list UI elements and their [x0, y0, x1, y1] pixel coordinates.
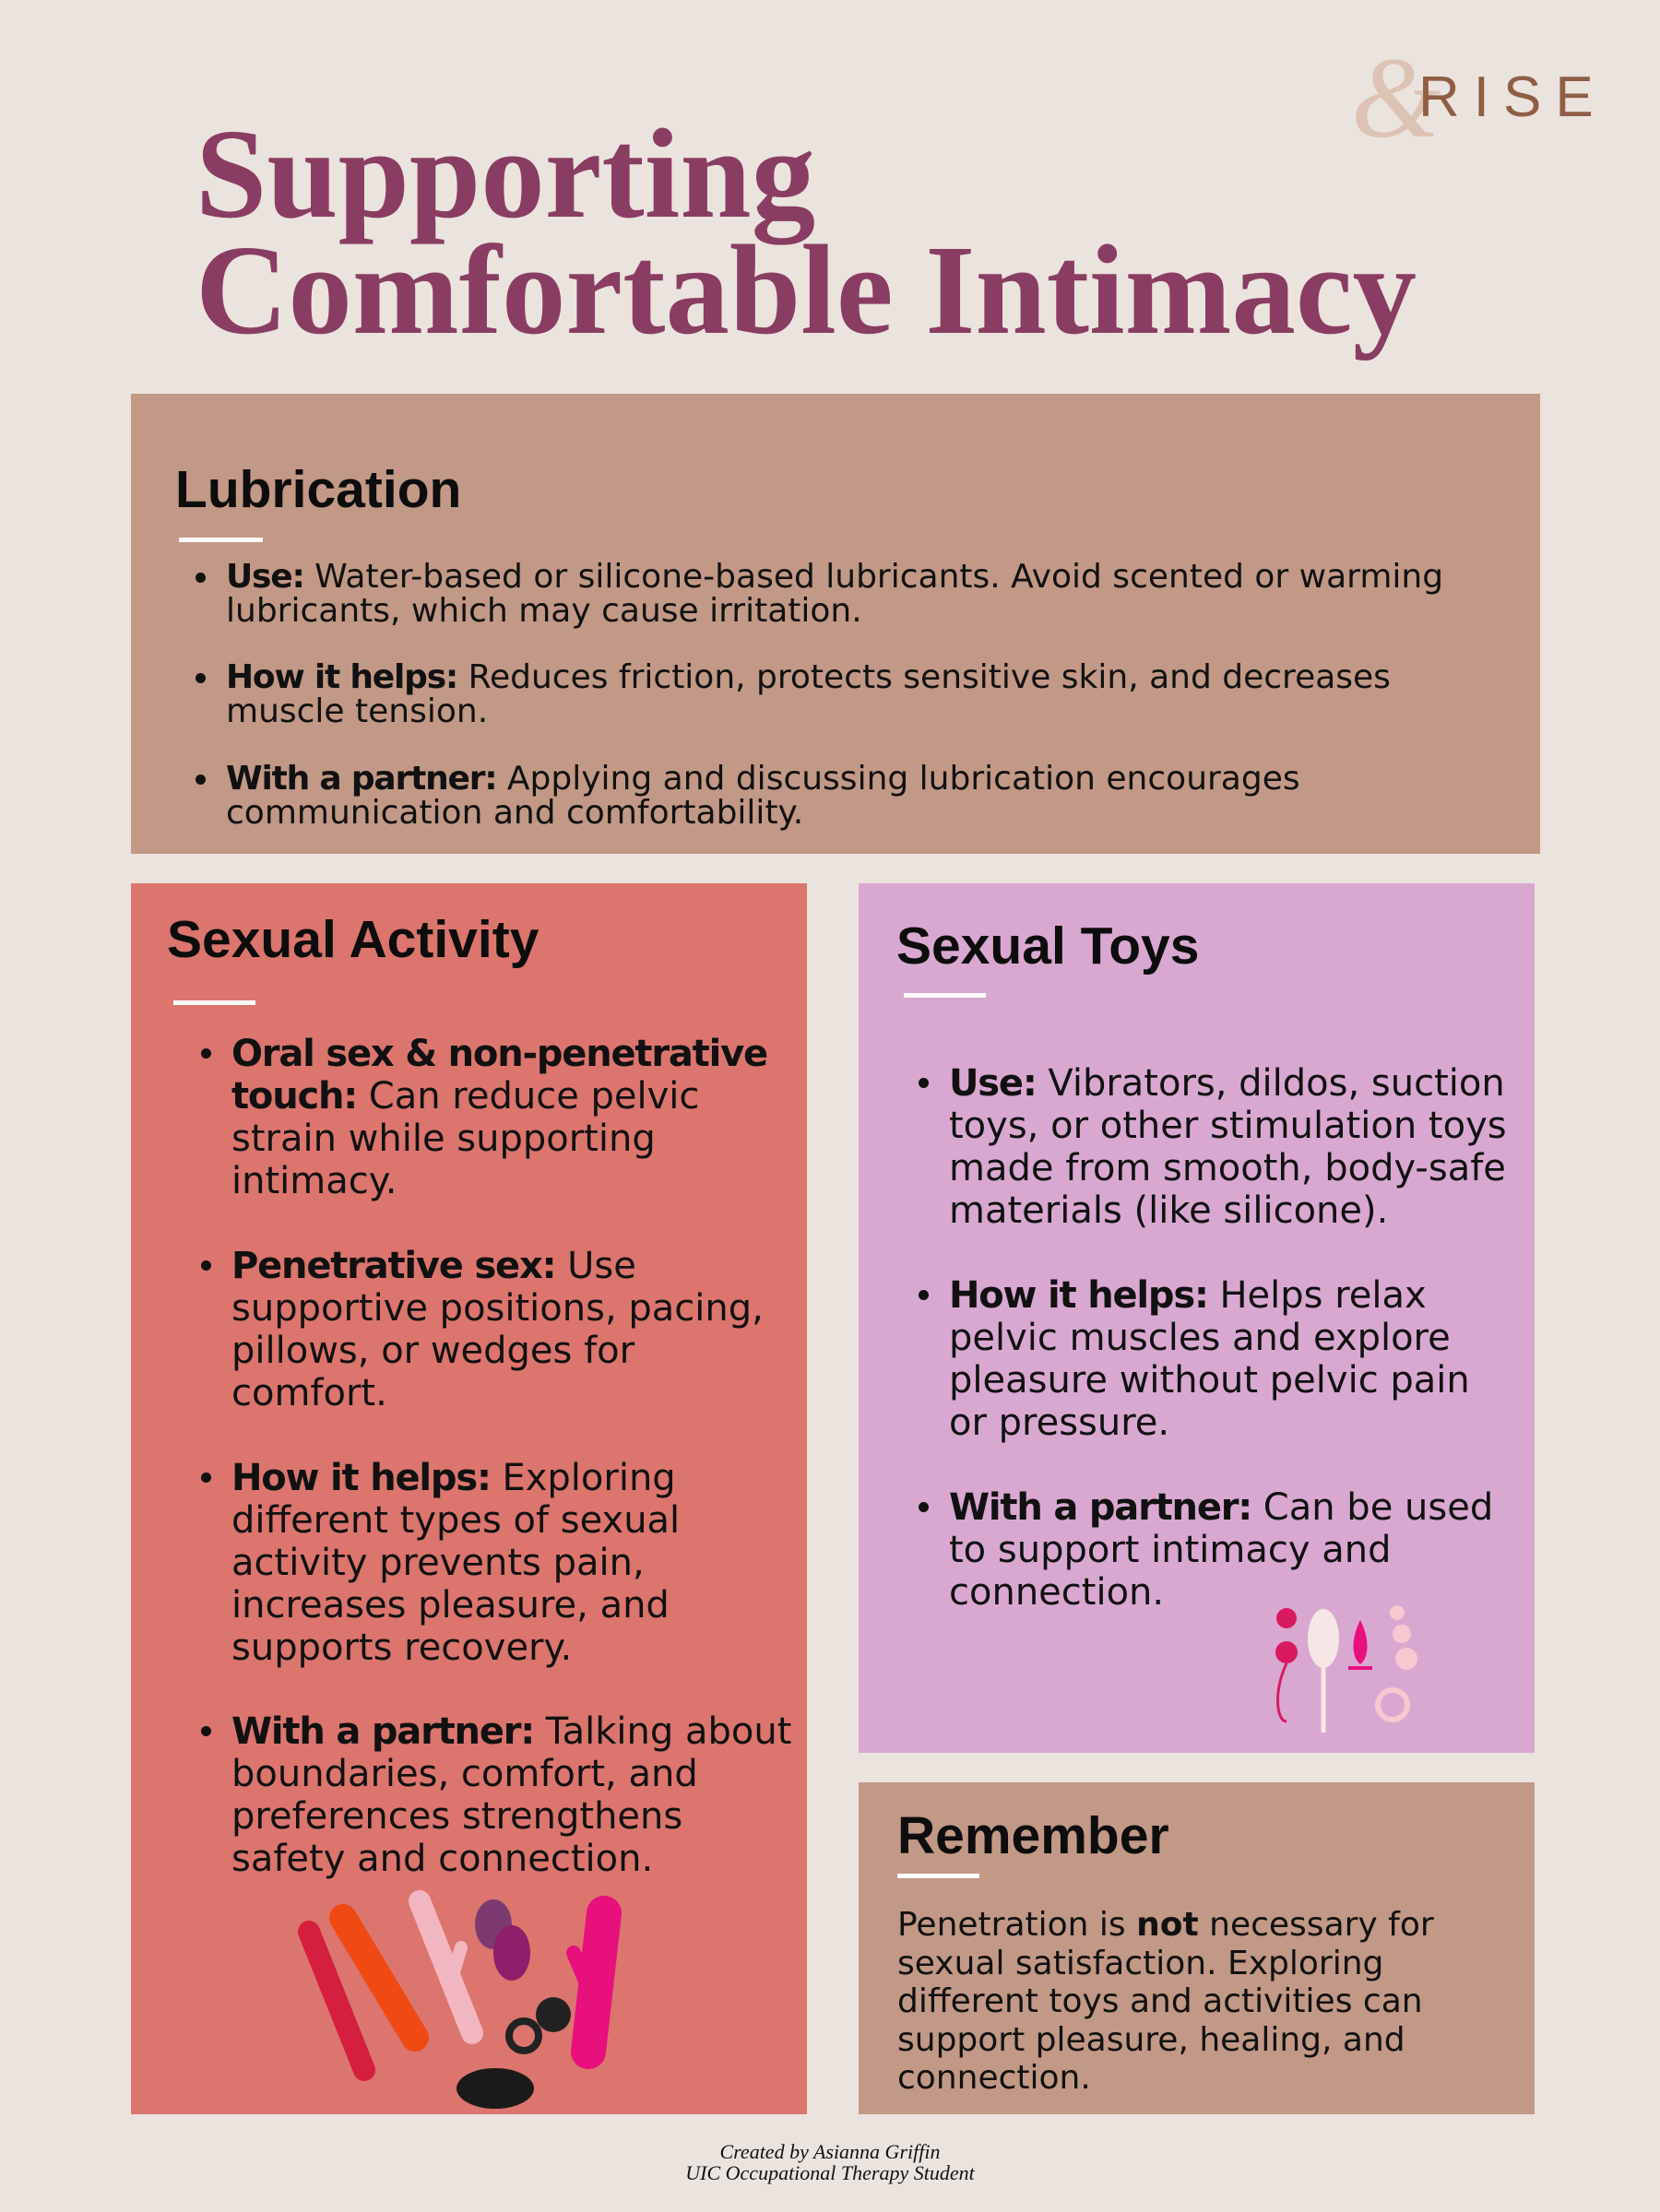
panel: sexual toys: toys, or other stimulation toys	[949, 1105, 1507, 1147]
panel: sexual activity: increases pleasure, and	[231, 1584, 670, 1626]
remember text	[897, 1906, 1434, 2097]
panel: sexual toys: or pressure.	[949, 1402, 1169, 1444]
panel: sexual toys: materials (like silicone).	[949, 1189, 1388, 1232]
panel: lubrication: How it helps: Reduces friction, protects sensitive skin, and decreases	[226, 658, 1391, 696]
panel: sexual activity: touch: Can reduce pelvic	[231, 1075, 699, 1118]
lubrication bullets	[196, 558, 1443, 832]
panel: sexual activity: With a partner: Talking about	[231, 1710, 791, 1753]
panel: sexual toys	[859, 883, 1535, 1753]
panel: sexual toys: With a partner: Can be used	[949, 1486, 1493, 1529]
panel: sexual activity: comfort.	[231, 1372, 387, 1414]
remember text: Penetration is not necessary for	[897, 1906, 1434, 1944]
panel: sexual activity: safety and connection.	[231, 1838, 653, 1880]
panel: sexual toys: connection.	[949, 1571, 1164, 1614]
heading: remember: Remember	[897, 1806, 1169, 1865]
panel: sexual activity: supports recovery.	[231, 1626, 572, 1669]
panel: sexual toys: to support intimacy and	[949, 1529, 1392, 1571]
panel: sexual activity: pillows, or wedges for	[231, 1330, 634, 1372]
toys bullets	[919, 1062, 1507, 1697]
panel: sexual activity: Penetrative sex: Use	[231, 1245, 636, 1287]
title	[196, 103, 1417, 361]
heading: lubrication: Lubrication	[175, 460, 461, 519]
panel: sexual activity: strain while supporting	[231, 1118, 656, 1160]
panel: sexual activity: supportive positions, pacing,	[231, 1287, 764, 1330]
remember text: support pleasure, healing, and	[897, 2021, 1405, 2058]
panel: sexual toys: Use: Vibrators, dildos, suction	[949, 1062, 1505, 1105]
illustration: assorted toys	[298, 1890, 622, 2109]
panel: sexual activity: different types of sexual	[231, 1499, 680, 1542]
remember text: sexual satisfaction. Exploring	[897, 1944, 1383, 1982]
footer credit: Created by Asianna Griffin	[720, 2140, 940, 2163]
panel: sexual activity: How it helps: Exploring	[231, 1457, 676, 1499]
panel: sexual activity: intimacy.	[231, 1160, 397, 1202]
panel: sexual activity: Oral sex & non-penetrative	[231, 1033, 767, 1075]
panel: lubrication: communication and comfortability.	[226, 794, 803, 832]
logo: RISE	[1418, 65, 1607, 129]
panel: sexual activity: boundaries, comfort, and	[231, 1753, 698, 1795]
panel: sexual activity: preferences strengthens	[231, 1795, 682, 1838]
remember text: different toys and activities can	[897, 1982, 1423, 2020]
title: Supporting	[196, 103, 815, 245]
title: Comfortable Intimacy	[196, 219, 1417, 361]
logo	[1351, 35, 1607, 162]
footer credit: UIC Occupational Therapy Student	[685, 2161, 975, 2184]
panel: sexual toys: made from smooth, body-safe	[949, 1147, 1506, 1189]
panel: lubrication: muscle tension.	[226, 692, 488, 730]
logo: &	[1351, 35, 1441, 162]
panel: lubrication: Use: Water-based or silicone-based lubricants. Avoid scented or warming	[226, 558, 1443, 596]
illustration: small toys	[1275, 1605, 1417, 1733]
heading: sexual activity: Sexual Activity	[167, 910, 539, 969]
remember text: connection.	[897, 2059, 1091, 2097]
panel: lubrication: lubricants, which may cause irritation.	[226, 592, 862, 630]
panel: sexual toys: pleasure without pelvic pain	[949, 1359, 1470, 1402]
panel: lubrication: With a partner: Applying and discussing lubrication encourages	[226, 760, 1300, 798]
panel: sexual toys: pelvic muscles and explore	[949, 1317, 1451, 1359]
panel: sexual activity	[131, 883, 807, 2114]
panel: lubrication	[131, 394, 1540, 854]
footer credit	[685, 2140, 976, 2184]
activity bullets	[201, 1033, 791, 1880]
panel: sexual toys: How it helps: Helps relax	[949, 1274, 1427, 1317]
heading: sexual toys: Sexual Toys	[896, 917, 1199, 976]
panel: remember	[859, 1782, 1535, 2114]
panel: sexual activity: activity prevents pain,	[231, 1542, 645, 1584]
